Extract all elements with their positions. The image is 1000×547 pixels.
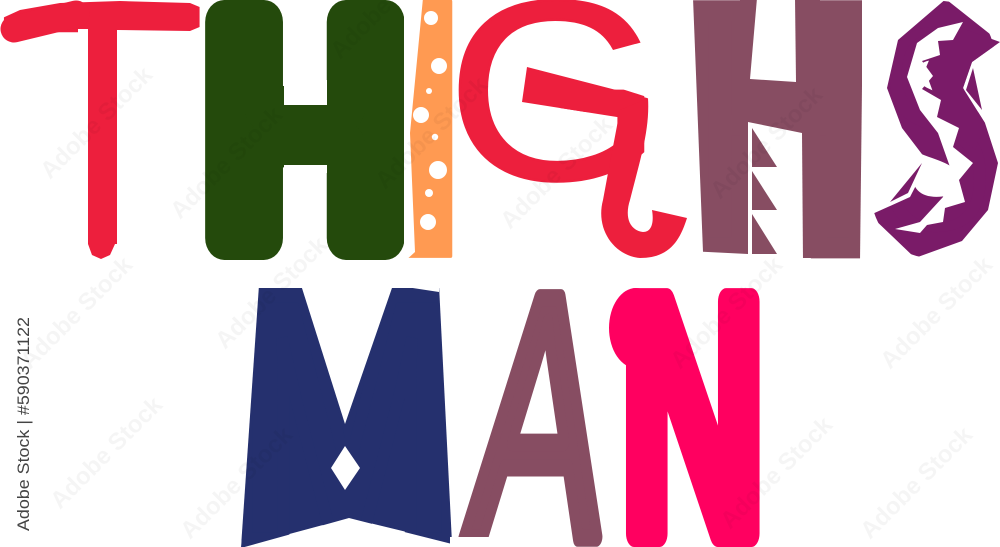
background watermarks: Adobe Stock bbox=[175, 421, 298, 544]
background watermarks: Adobe Stock bbox=[665, 251, 788, 374]
background watermarks: Adobe Stock bbox=[495, 111, 618, 234]
background watermarks: Adobe Stock bbox=[165, 101, 288, 224]
background watermarks: Adobe Stock bbox=[715, 411, 838, 534]
background watermarks: Adobe Stock bbox=[855, 421, 978, 544]
background watermarks: Adobe Stock bbox=[875, 251, 998, 374]
background watermarks: Adobe Stock bbox=[210, 231, 333, 354]
background watermarks: Adobe Stock bbox=[35, 61, 158, 184]
background watermarks: Adobe Stock bbox=[45, 391, 168, 514]
side credit: Adobe Stock | #590371122 bbox=[14, 317, 33, 531]
background watermarks: Adobe Stock bbox=[370, 71, 493, 194]
background watermarks: Adobe Stock bbox=[705, 81, 828, 204]
background watermarks: Adobe Stock bbox=[15, 251, 138, 374]
